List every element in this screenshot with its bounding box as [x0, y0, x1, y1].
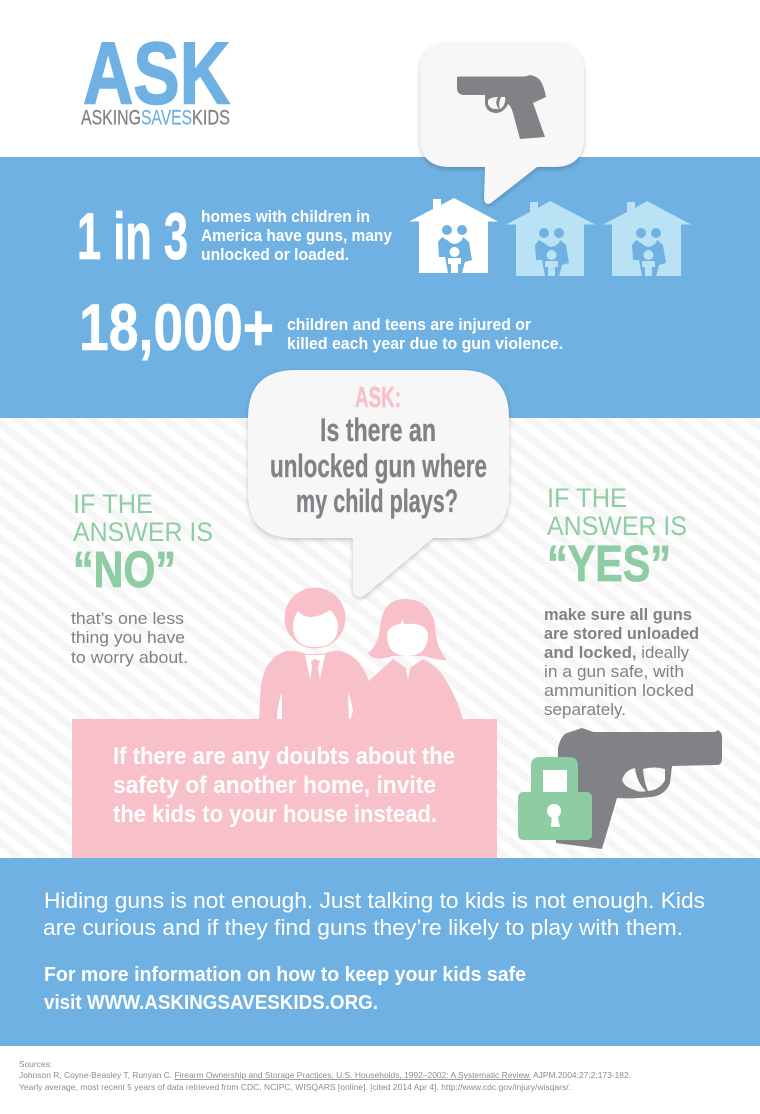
logo: ASK Asking Saves Kids: SAVES — [141, 106, 192, 130]
callout: invite the kids: If there are any doubts about the — [113, 743, 455, 770]
text: injuries statistic description — [287, 316, 563, 353]
text: yes answer advice: make sure all guns — [544, 606, 692, 624]
icon: handgun — [457, 75, 546, 139]
callout: invite the kids: safety of another home, invite — [113, 772, 436, 799]
text: sources — [19, 1059, 631, 1092]
text: no answer advice: thing you have — [71, 628, 185, 647]
text: sources: Sources: — [19, 1059, 52, 1069]
text: question: Is there an — [320, 412, 436, 448]
logo: ASK Asking Saves Kids: ASKING — [81, 106, 141, 130]
text: question — [270, 412, 487, 519]
text: homes statistic description: homes with children in — [201, 208, 370, 226]
panel: blue statistics band — [0, 157, 760, 418]
handgun — [556, 728, 722, 849]
woman — [350, 599, 463, 720]
text: yes answer advice: in a gun safe, with — [544, 663, 684, 681]
text: hiding guns is not enough: are curious and if they find guns they’re likely to play with them. — [43, 915, 683, 940]
text: hiding guns is not enough: Hiding guns is not enough. Just talking to kids is not enough. Kids — [44, 888, 705, 913]
icon: locked gun — [518, 728, 722, 849]
padlock — [518, 757, 592, 840]
text: injuries statistic description: killed each year due to gun violence. — [287, 335, 563, 353]
text: homes statistic description — [201, 208, 393, 264]
illustration: parents — [259, 588, 463, 720]
text: question: unlocked gun where — [270, 448, 487, 484]
text: yes answer advice: separately. — [544, 701, 626, 719]
man — [259, 588, 370, 720]
text: hiding guns is not enough — [43, 888, 705, 940]
statistic: 1 in 3: 1 in 3 — [77, 199, 188, 273]
text: no answer advice: to worry about. — [71, 648, 188, 667]
panel: striped question background — [0, 418, 760, 858]
text: more information call to action: visit WWW.ASKINGSAVESKIDS.ORG. — [44, 992, 378, 1014]
heading: if the answer is no: ANSWER IS — [73, 517, 213, 547]
heading: if the answer is no: IF THE — [73, 489, 153, 519]
text: homes statistic description: unlocked or loaded. — [201, 246, 349, 264]
heading: if the answer is no — [73, 489, 213, 598]
text: question: my child plays? — [296, 483, 458, 519]
panel: blue closing band — [0, 858, 760, 1046]
heading: if the answer is yes — [547, 483, 687, 592]
text: yes answer advice: and locked, ideally — [544, 644, 690, 662]
speech bubble with gun — [420, 43, 584, 204]
heading: if the answer is no: “NO” — [73, 541, 176, 598]
text: no answer advice — [71, 609, 188, 667]
heading: if the answer is yes: ANSWER IS — [547, 511, 687, 541]
label: ASK: ASK: — [355, 382, 401, 414]
text: sources: Yearly average, most recent 5 years of data retrieved from CDC, NCIPC, WISQARS [online]. [cited 2014 Apr 4]. http://www.cdc.gov/injury/wisqars/. — [19, 1082, 571, 1092]
logo: ASK Asking Saves Kids: ASK — [83, 24, 230, 122]
statistic: 18,000+: 18,000+ — [79, 290, 274, 364]
heading: if the answer is yes: IF THE — [547, 483, 627, 513]
text: sources: Johnson R, Coyne-Beasley T, Runyan C. Firearm Ownership and Storage Practices, U.S. Households, 1992–2002: A Systematic Review. AJPM.2004;27:2:173-182. — [19, 1070, 631, 1080]
icon: pale blue house with family — [603, 201, 691, 276]
text: yes answer advice: ammunition locked — [544, 682, 694, 700]
text: more information call to action: For more information on how to keep your kids safe — [44, 964, 526, 986]
text: more information call to action — [44, 964, 526, 1014]
callout: invite the kids — [72, 719, 497, 858]
text: homes statistic description: America have guns, many — [201, 227, 393, 245]
logo: ASK Asking Saves Kids: KIDS — [192, 106, 230, 130]
callout: invite the kids: the kids to your house instead. — [113, 801, 437, 828]
text: yes answer advice: are stored unloaded — [544, 625, 699, 643]
text: yes answer advice — [544, 606, 699, 719]
icon: white house with family — [409, 198, 498, 273]
text: injuries statistic description: children and teens are injured or — [287, 316, 532, 334]
text: no answer advice: that’s one less — [71, 609, 184, 628]
heading: if the answer is yes: “YES” — [547, 535, 671, 592]
speech bubble: ask question — [248, 370, 509, 597]
icon: pale blue house with family — [506, 201, 595, 276]
